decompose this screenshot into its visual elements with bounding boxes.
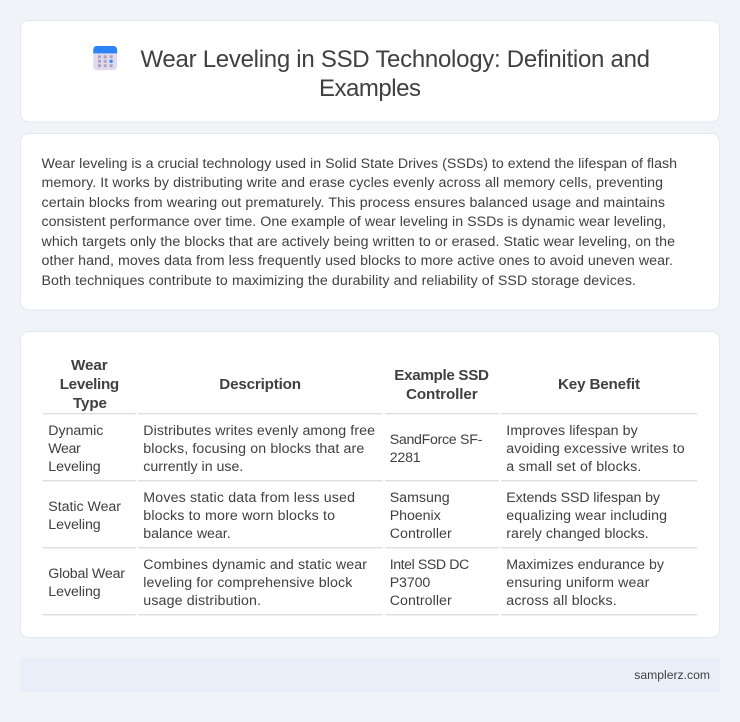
table row: dynamic wear leveling: 2281 — [390, 450, 421, 466]
table header: Wear — [71, 357, 108, 374]
table row: global wear leveling: P3700 — [390, 575, 430, 591]
table row: dynamic wear leveling — [48, 423, 685, 475]
table row: static wear leveling: equalizing wear including — [506, 508, 667, 524]
title: Examples — [319, 75, 421, 102]
text block: definition paragraph: certain blocks from wearing out prematurely. This process ensures balanced usage and maintains — [42, 195, 665, 211]
text block: definition paragraph: consistent performance over time. One example of wear leveling in SSDs is dynamic wear leveling, — [42, 214, 666, 230]
table row: dynamic wear leveling: Dynamic — [48, 423, 103, 439]
table row: dynamic wear leveling: SandForce SF- — [390, 432, 483, 448]
footer — [20, 658, 720, 692]
table header: Leveling — [60, 376, 119, 393]
text block: definition paragraph: Wear leveling is a crucial technology used in Solid State Drives (SSDs) to extend the lifespan of flash — [42, 156, 677, 172]
text block: definition paragraph: memory. It works by distributing write and erase cycles evenly across all memory cells, preventing — [42, 175, 663, 191]
text block: definition paragraph: Both techniques contribute to maximizing the durability and reliability of SSD storage devices. — [42, 273, 636, 289]
table row: static wear leveling: Leveling — [48, 517, 101, 533]
table row: static wear leveling: rarely changed blocks. — [506, 526, 649, 542]
table row: static wear leveling: blocks to more worn blocks to — [143, 508, 335, 524]
table row: dynamic wear leveling: Wear — [48, 441, 81, 457]
text block: definition paragraph: which targets only the blocks that are actively being written to or erased. Static wear leveling, on the — [40, 234, 675, 250]
table row: dynamic wear leveling: Improves lifespan by — [506, 423, 639, 439]
panel: comparison table — [20, 332, 720, 638]
table row: static wear leveling: Samsung — [390, 490, 450, 506]
table row: global wear leveling: ensuring uniform wear — [506, 575, 650, 591]
table row: global wear leveling: Combines dynamic and static wear — [143, 557, 367, 573]
table row: dynamic wear leveling: blocks, focusing on blocks that are — [143, 441, 364, 457]
text block: definition paragraph — [40, 156, 677, 289]
table header: Key Benefit — [558, 376, 640, 393]
table row: global wear leveling: Global Wear — [48, 566, 125, 582]
footer: samplerz.com — [634, 668, 710, 682]
table row: static wear leveling: Moves static data from less used — [143, 490, 355, 506]
text block: definition paragraph: other hand, moves data from less frequently used blocks to more active ones to avoid uneven wear. — [42, 253, 673, 269]
table header: Controller — [406, 386, 478, 403]
table row: global wear leveling: Controller — [390, 593, 452, 609]
table row: global wear leveling: usage distribution. — [143, 593, 261, 609]
table row: dynamic wear leveling: avoiding excessive writes to — [506, 441, 685, 457]
table row: static wear leveling: Extends SSD lifespan by — [506, 490, 661, 506]
icon: calendar — [93, 46, 117, 70]
title — [140, 46, 650, 102]
table row: static wear leveling: Static Wear — [48, 499, 121, 515]
table header — [60, 357, 640, 412]
panel: introduction — [20, 134, 720, 310]
table row: global wear leveling: Maximizes endurance by — [506, 557, 665, 573]
panel: title card — [20, 20, 720, 122]
table row: dynamic wear leveling: Leveling — [48, 459, 101, 475]
table row: static wear leveling — [48, 490, 667, 542]
table row: global wear leveling: leveling for comprehensive block — [143, 575, 353, 591]
table row: global wear leveling — [48, 557, 665, 609]
table row: static wear leveling: balance wear. — [143, 526, 231, 542]
table row: global wear leveling: Intel SSD DC — [390, 557, 469, 573]
table header: Example SSD — [394, 367, 489, 384]
table row: global wear leveling: Leveling — [48, 584, 101, 600]
table row: dynamic wear leveling: currently in use. — [143, 459, 243, 475]
table header: Type — [73, 395, 107, 412]
title: Wear Leveling in SSD Technology: Definition and — [140, 46, 650, 73]
table row: dynamic wear leveling: Distributes writes evenly among free — [143, 423, 375, 439]
table row: dynamic wear leveling: a small set of blocks. — [506, 459, 641, 475]
table header: Description — [219, 376, 301, 393]
table row: global wear leveling: across all blocks. — [506, 593, 617, 609]
table row: static wear leveling: Controller — [390, 526, 452, 542]
table row: static wear leveling: Phoenix — [390, 508, 441, 524]
